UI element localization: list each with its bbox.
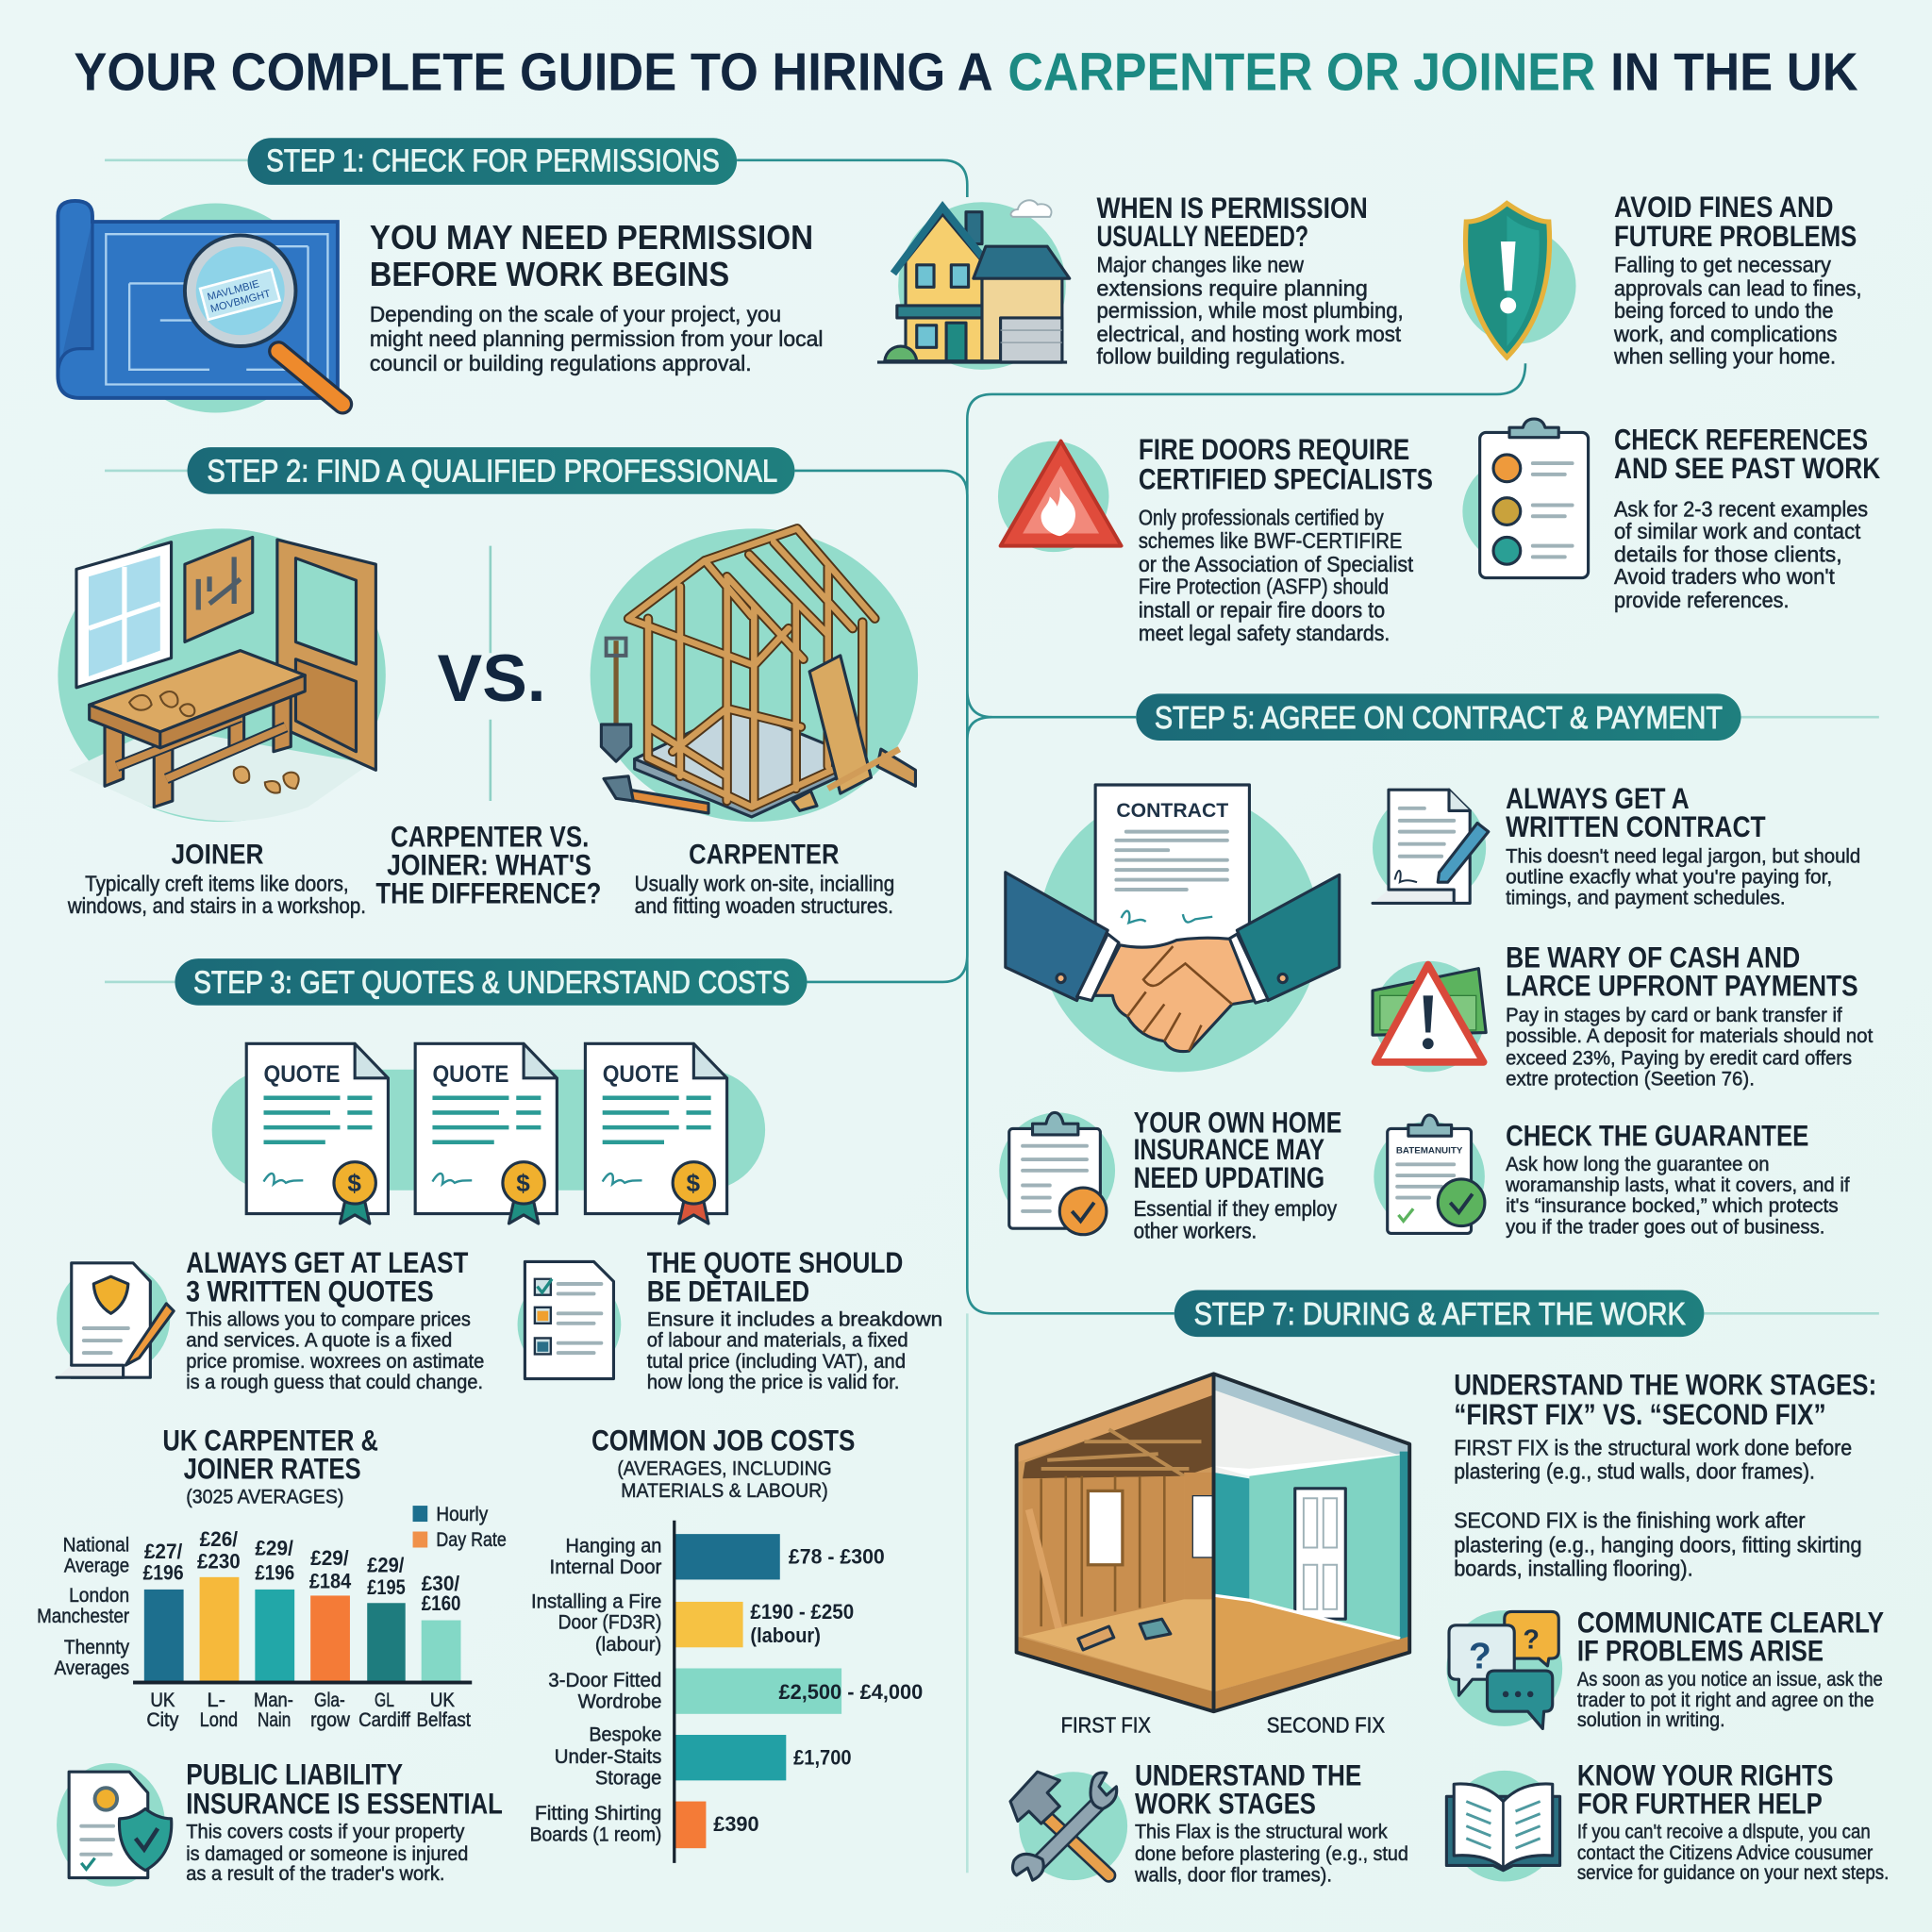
panel: avoid fines	[1460, 191, 1862, 368]
job labels: 3-Door Fitted	[548, 1668, 661, 1691]
axis labels: London	[69, 1583, 129, 1607]
body text: done before plastering (e.g., stud	[1135, 1841, 1408, 1865]
carpenter label	[635, 840, 894, 918]
panel: written contract	[1373, 782, 1860, 909]
chart heading	[591, 1424, 855, 1502]
heading: BEFORE WORK BEGINS	[370, 255, 729, 293]
body text: If you can't recoive a dlspute, you can	[1577, 1820, 1871, 1843]
body text	[1577, 1820, 1889, 1884]
heading	[1135, 1759, 1361, 1821]
icon: guarantee clipboard	[1374, 1115, 1485, 1233]
icon: clipboard with orange tick	[999, 1112, 1115, 1235]
quote document 2	[415, 1043, 557, 1224]
panel: understand work stages	[1010, 1759, 1408, 1886]
city labels: Man-	[254, 1688, 293, 1711]
step 2 pill: STEP 2: FIND A QUALIFIED PROFESSIONAL	[207, 455, 777, 490]
panel: joiner	[58, 528, 386, 918]
icon: warning and cash	[1373, 961, 1486, 1072]
heading: WORK STAGES	[1135, 1788, 1316, 1821]
bar values: £184	[309, 1570, 352, 1593]
panel: know your rights	[1446, 1759, 1889, 1884]
heading: UNDERSTAND THE	[1135, 1759, 1361, 1792]
icon: open book	[1446, 1771, 1560, 1881]
job values: £1,700	[793, 1745, 852, 1769]
panel: rates chart	[37, 1424, 507, 1731]
body text: Fire Protection (ASFP) should	[1139, 575, 1389, 599]
heading	[1139, 433, 1433, 496]
joiner label: windows, and stairs in a workshop.	[67, 893, 366, 918]
body text: it's “insurance bocked,” which protects	[1506, 1193, 1839, 1217]
heading	[186, 1757, 503, 1821]
job labels: Storage	[595, 1765, 661, 1789]
heading: THE QUOTE SHOULD	[647, 1246, 903, 1279]
job labels: Under-Staits	[555, 1744, 661, 1768]
icon: checklist document	[518, 1261, 621, 1379]
panel: three quotes	[212, 1043, 765, 1224]
quote document 3	[585, 1043, 727, 1224]
city labels: UK	[150, 1688, 175, 1711]
job values: £78 - £300	[789, 1544, 885, 1568]
heading: ALWAYS GET A	[1506, 782, 1690, 815]
body text	[1505, 1152, 1850, 1238]
icon: contract and pen	[1373, 790, 1489, 905]
panel: references	[1462, 419, 1880, 612]
body text: other workers.	[1134, 1219, 1257, 1243]
heading	[1506, 782, 1766, 843]
icon: clipboard of people	[1462, 419, 1589, 578]
body text: boards, installing flooring).	[1454, 1557, 1693, 1581]
body text	[1506, 843, 1860, 909]
heading	[370, 218, 813, 293]
body text	[1134, 1820, 1408, 1886]
difference heading: CARPENTER VS.	[391, 820, 589, 853]
city labels: GL	[375, 1688, 394, 1711]
body text: Avoid traders who won't	[1614, 564, 1835, 589]
body text: timings, and payment schedules.	[1506, 886, 1786, 909]
difference heading: THE DIFFERENCE?	[375, 876, 601, 909]
body text	[186, 1820, 468, 1885]
body text: of similar work and contact	[1614, 519, 1861, 543]
bar values: £196	[255, 1560, 294, 1584]
room labels: FIRST FIX	[1061, 1712, 1151, 1737]
panel: cash warning	[1373, 941, 1873, 1091]
panel: home insurance	[999, 1106, 1341, 1243]
heading	[1577, 1759, 1834, 1821]
body text: Ensure it includes a breakdown	[647, 1307, 942, 1330]
heading	[1454, 1369, 1876, 1431]
city labels: Lond	[200, 1707, 238, 1731]
joiner label: JOINER	[172, 840, 264, 871]
horizontal bars	[673, 1521, 841, 1863]
icon: document and pencil	[57, 1261, 174, 1377]
quote document 3: QUOTE	[603, 1062, 679, 1088]
icon: fire warning triangle	[998, 441, 1122, 552]
axis labels: National	[63, 1532, 129, 1556]
body text: Essential if they employ	[1134, 1196, 1338, 1221]
heading	[647, 1246, 903, 1307]
body text: trader to pot it right and agree on the	[1577, 1688, 1874, 1711]
illustration: contract and handshake	[1006, 785, 1340, 1072]
heading: NEED UPDATING	[1134, 1161, 1324, 1194]
quote document 2: $	[516, 1169, 530, 1197]
heading: YOU MAY NEED PERMISSION	[370, 218, 813, 257]
step 5 pill: STEP 5: AGREE ON CONTRACT & PAYMENT	[1155, 701, 1723, 736]
city labels: UK	[430, 1688, 456, 1711]
body text	[1134, 1196, 1338, 1243]
city labels: Gla-	[314, 1688, 345, 1711]
job labels: Internal Door	[550, 1555, 661, 1578]
body text	[370, 302, 823, 375]
quote document 1: QUOTE	[264, 1062, 340, 1088]
body text	[1614, 496, 1868, 612]
body text: approvals can lead to fines,	[1614, 275, 1862, 300]
body text: Falling to get necessary	[1614, 253, 1831, 277]
heading: PUBLIC LIABILITY	[186, 1757, 403, 1790]
body text: council or building regulations approval.	[370, 351, 752, 375]
heading: BE DETAILED	[647, 1274, 809, 1307]
job values: (labour)	[750, 1624, 821, 1647]
job values: £2,500 - £4,000	[778, 1680, 923, 1704]
body text: service for guidance on your next steps.	[1577, 1860, 1889, 1884]
heading: INSURANCE MAY	[1134, 1133, 1324, 1166]
body text: woramanship lasts, what it covers, and if	[1505, 1173, 1850, 1196]
body text: price promise. woxrees on astimate	[186, 1349, 484, 1373]
heading: CERTIFIED SPECIALISTS	[1139, 463, 1433, 496]
heading: WRITTEN CONTRACT	[1506, 810, 1766, 843]
bar values: £29/	[310, 1546, 349, 1570]
bar values: £230	[197, 1550, 241, 1574]
legend: Hourly	[436, 1502, 488, 1525]
body text: contact the Citizens Advice cousumer	[1577, 1840, 1873, 1864]
icon: shield warning	[1460, 204, 1576, 358]
difference heading: JOINER: WHAT'S	[387, 848, 591, 881]
bar values: £26/	[200, 1527, 238, 1551]
body text: This allows you to compare prices	[186, 1307, 471, 1330]
axis labels: Average	[64, 1554, 129, 1577]
body text: exceed 23%, Paying by eredit card offers	[1506, 1045, 1852, 1069]
step 3 pill: STEP 3: GET QUOTES & UNDERSTAND COSTS	[193, 966, 790, 1001]
illustration: first fix second fix room	[1017, 1373, 1409, 1711]
illustration: joiner workshop	[58, 528, 386, 822]
room labels	[1061, 1712, 1385, 1737]
job values: £190 - £250	[750, 1600, 854, 1624]
panel: always get 3 quotes	[57, 1246, 484, 1393]
axis labels	[37, 1532, 129, 1679]
body text	[1454, 1436, 1862, 1581]
body text: outline exacfly what you're paying for,	[1506, 864, 1832, 888]
job values	[713, 1544, 923, 1836]
body text: possible. A deposit for materials should not	[1506, 1024, 1873, 1047]
body text: when selling your home.	[1613, 343, 1836, 368]
panel: communicate	[1446, 1607, 1884, 1731]
body text: This covers costs if your property	[186, 1820, 465, 1843]
bar values: £27/	[144, 1540, 182, 1563]
heading: ALWAYS GET AT LEAST	[186, 1246, 468, 1279]
chart heading: COMMON JOB COSTS	[591, 1424, 855, 1457]
body text: of labour and materials, a fixed	[647, 1328, 908, 1352]
title: IN THE UK	[1610, 42, 1858, 101]
panel: permission intro	[58, 201, 823, 413]
body text: extre protection (Seetion 76).	[1506, 1067, 1755, 1091]
legend	[413, 1502, 507, 1551]
job labels: Installing a Fire	[531, 1589, 661, 1612]
body text	[1139, 505, 1414, 645]
title: YOUR COMPLETE GUIDE TO HIRING A	[74, 42, 993, 101]
panel: work stages explained	[1454, 1369, 1876, 1581]
quote document 1: $	[347, 1169, 361, 1197]
icon: blueprint and magnifier: MAVLMBIE	[207, 278, 260, 303]
panel: quote detailed	[518, 1246, 942, 1393]
body text: how long the price is valid for.	[647, 1370, 899, 1393]
quote document 1	[246, 1043, 388, 1224]
body text	[647, 1307, 942, 1393]
job labels: Fitting Shirting	[535, 1801, 661, 1824]
job labels: Bespoke	[589, 1723, 661, 1746]
body text: follow building regulations.	[1096, 343, 1345, 368]
body text: plastering (e.g., hanging doors, fitting skirting	[1454, 1533, 1862, 1557]
bar values	[143, 1527, 460, 1615]
body text	[1577, 1667, 1883, 1731]
bar values: £195	[367, 1575, 406, 1599]
heading: “FIRST FIX” VS. “SECOND FIX”	[1454, 1398, 1826, 1431]
body text: and services. A quote is a fixed	[186, 1328, 452, 1352]
chart heading: JOINER RATES	[184, 1452, 361, 1485]
icon: blueprint and magnifier: MOVBMGHT	[209, 288, 272, 315]
difference heading	[375, 820, 601, 909]
chart heading: (AVERAGES, INCLUDING	[617, 1456, 832, 1479]
body text: Pay in stages by card or bank transfer if	[1506, 1003, 1843, 1026]
heading	[1096, 192, 1368, 253]
heading: IF PROBLEMS ARISE	[1577, 1635, 1824, 1668]
body text: as a result of the trader's work.	[186, 1861, 445, 1885]
illustration: timber frame	[591, 528, 918, 822]
legend: Day Rate	[436, 1527, 507, 1551]
body text	[1613, 253, 1862, 368]
body text: Depending on the scale of your project, you	[370, 302, 781, 326]
step 1 pill: STEP 1: CHECK FOR PERMISSIONS	[266, 144, 720, 179]
panel: public liability	[57, 1757, 503, 1887]
heading: BE WARY OF CASH AND	[1506, 941, 1800, 974]
panel: carpenter	[591, 528, 918, 918]
job labels: Boards (1 reom)	[530, 1822, 661, 1845]
carpenter label: and fitting woaden structures.	[635, 893, 893, 918]
chart heading: MATERIALS & LABOUR)	[621, 1478, 828, 1502]
step 3 pill	[175, 958, 808, 1006]
heading: KNOW YOUR RIGHTS	[1577, 1759, 1834, 1792]
icon: speech bubbles: ?	[1523, 1625, 1540, 1656]
heading: USUALLY NEEDED?	[1096, 220, 1308, 253]
body text: Ask for 2-3 recent examples	[1614, 496, 1868, 521]
body text: As soon as you notice an issue, ask the	[1577, 1667, 1883, 1690]
chart heading: UK CARPENTER &	[162, 1424, 378, 1457]
job labels: Wordrobe	[578, 1689, 661, 1712]
room labels: SECOND FIX	[1267, 1712, 1385, 1737]
chart heading: (3025 AVERAGES)	[186, 1484, 343, 1507]
icon: blueprint and magnifier	[58, 201, 342, 413]
quote document 3: $	[687, 1169, 701, 1197]
icon: document with shield	[57, 1763, 172, 1887]
heading: FIRE DOORS REQUIRE	[1139, 433, 1409, 466]
axis labels: Manchester	[37, 1604, 129, 1627]
heading: CHECK REFERENCES	[1614, 424, 1868, 457]
body text: you if the trader goes out of business.	[1506, 1214, 1824, 1238]
heading	[1614, 191, 1857, 253]
joiner label	[67, 840, 366, 918]
heading: CHECK THE GUARANTEE	[1506, 1120, 1808, 1153]
panel: guarantee	[1374, 1115, 1850, 1238]
quote document 2: QUOTE	[432, 1062, 508, 1088]
body text: details for those clients,	[1614, 542, 1842, 567]
city labels: Cardiff	[358, 1707, 411, 1731]
bar values: £196	[143, 1560, 184, 1584]
body text: being forced to undo the	[1614, 298, 1834, 323]
body text: provide references.	[1614, 588, 1789, 612]
job labels: Hanging an	[566, 1534, 661, 1557]
step 2 pill	[188, 447, 794, 494]
bar values: £30/	[422, 1572, 459, 1595]
panel: fire doors	[998, 433, 1433, 645]
body text: is a rough guess that could change.	[186, 1370, 483, 1393]
heading	[1134, 1106, 1341, 1194]
body text: walls, door flor trames).	[1134, 1862, 1332, 1886]
body text: install or repair fire doors to	[1139, 597, 1385, 622]
heading	[1506, 941, 1858, 1002]
job labels: Door (FD3R)	[558, 1610, 661, 1634]
body text	[1506, 1003, 1873, 1091]
title	[74, 42, 1858, 101]
body text: permission, while most plumbing,	[1096, 298, 1404, 323]
bar values: £160	[422, 1591, 460, 1615]
panel: job costs chart	[530, 1424, 923, 1863]
step 5 pill	[1136, 693, 1741, 741]
job labels: (labour)	[595, 1632, 661, 1656]
icon: speech bubbles: ?	[1469, 1636, 1491, 1676]
heading: YOUR OWN HOME	[1134, 1106, 1341, 1139]
bar values: £29/	[367, 1554, 404, 1577]
heading: LARCE UPFRONT PAYMENTS	[1506, 969, 1858, 1002]
job values: £390	[713, 1812, 759, 1836]
heading: FUTURE PROBLEMS	[1614, 220, 1857, 253]
heading: AVOID FINES AND	[1614, 191, 1834, 224]
carpenter label: Usually work on-site, incialling	[635, 871, 894, 895]
city labels: Belfast	[416, 1707, 471, 1731]
heading: AND SEE PAST WORK	[1614, 452, 1880, 485]
city labels: rgow	[310, 1707, 350, 1731]
heading: INSURANCE IS ESSENTIAL	[186, 1788, 503, 1821]
carpenter label: CARPENTER	[689, 840, 840, 871]
body text: This Flax is the structural work	[1135, 1820, 1388, 1843]
body text: is damaged or someone is injured	[186, 1841, 468, 1865]
body text: meet legal safety standards.	[1139, 621, 1390, 645]
body text	[1096, 253, 1404, 368]
body text: SECOND FIX is the finishing work after	[1454, 1508, 1806, 1533]
bars	[133, 1577, 472, 1684]
heading	[1614, 424, 1880, 485]
step 1 pill	[248, 138, 737, 185]
body text: Major changes like new	[1096, 253, 1304, 277]
city labels: City	[146, 1707, 179, 1731]
body text: electrical, and hosting work most	[1096, 322, 1402, 346]
axis labels: Averages	[54, 1656, 129, 1679]
body text: solution in writing.	[1577, 1707, 1725, 1731]
illustration: contract and handshake: CONTRACT	[1116, 800, 1228, 822]
panel: when permission needed	[877, 192, 1404, 370]
joiner label: Typically creft items like doors,	[85, 871, 349, 895]
body text: might need planning permission from your local	[370, 326, 823, 351]
body text: FIRST FIX is the structural work done before	[1454, 1436, 1852, 1460]
body text: or the Association of Specialist	[1139, 552, 1414, 576]
icon: speech bubbles	[1446, 1610, 1562, 1728]
heading	[1577, 1607, 1884, 1668]
body text: plastering (e.g., stud walls, door frames).	[1454, 1458, 1815, 1483]
bar values: £29/	[255, 1536, 293, 1559]
job labels	[530, 1534, 661, 1845]
icon: guarantee clipboard: BATEMANUITY	[1396, 1146, 1462, 1156]
body text: schemes like BWF-CERTIFIRE	[1139, 528, 1402, 553]
icon: house	[877, 200, 1070, 370]
icon: hammer and spanner	[1010, 1772, 1127, 1880]
body text: tutal price (including VAT), and	[647, 1349, 906, 1373]
city labels	[146, 1688, 471, 1731]
body text: This doesn't need legal jargon, but should	[1506, 843, 1860, 867]
heading: WHEN IS PERMISSION	[1096, 192, 1368, 225]
body text: extensions require planning	[1096, 275, 1368, 300]
axis labels: Thennty	[64, 1635, 129, 1658]
title: CARPENTER OR JOINER	[1008, 42, 1595, 101]
chart heading	[162, 1424, 378, 1507]
heading	[186, 1246, 468, 1307]
heading: 3 WRITTEN QUOTES	[186, 1274, 434, 1307]
body text: Ask how long the guarantee on	[1506, 1152, 1770, 1175]
body text	[186, 1307, 484, 1393]
body text: Only professionals certified by	[1139, 505, 1384, 529]
city labels: Nain	[258, 1707, 291, 1731]
step 7 pill	[1174, 1291, 1704, 1337]
heading: FOR FURTHER HELP	[1577, 1788, 1823, 1821]
city labels: L-	[207, 1688, 225, 1711]
step 7 pill: STEP 7: DURING & AFTER THE WORK	[1194, 1297, 1686, 1332]
vs divider: VS.	[438, 641, 546, 715]
body text: work, and complications	[1613, 322, 1837, 346]
